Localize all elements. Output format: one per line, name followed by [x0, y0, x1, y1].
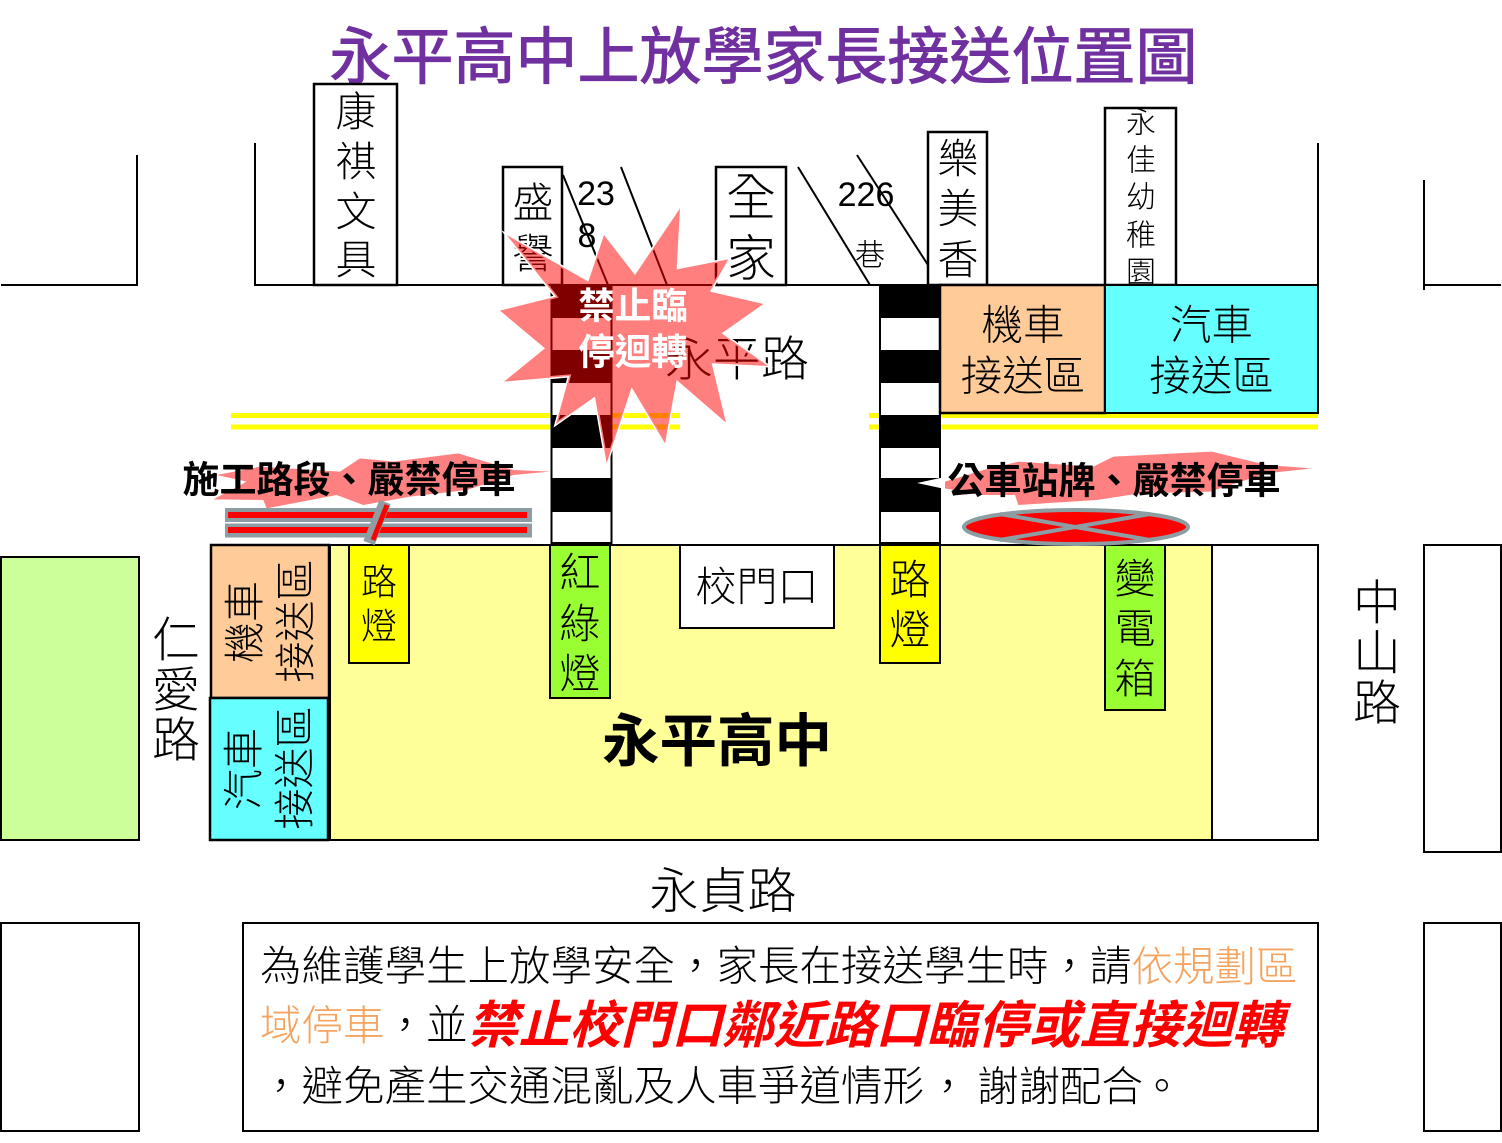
- school gate: [680, 545, 834, 628]
- motorcycle pickup zone left: [211, 545, 329, 698]
- motorcycle pickup zone top: 接送區: [961, 352, 1085, 400]
- alley number 238: [577, 175, 615, 255]
- road name: 永平路: 永平路: [665, 334, 809, 386]
- bottom left block: [1, 923, 139, 1131]
- warning burst: no stopping or U-turn: [500, 208, 768, 463]
- street light right: [880, 545, 940, 663]
- shop: 康祺文具: 康: [336, 89, 376, 135]
- shop: 樂美香: [928, 132, 987, 285]
- road name: 永貞路: 永貞路: [649, 865, 797, 919]
- school name: 永平高中: [602, 710, 832, 774]
- street light right: 路: [890, 557, 930, 603]
- warning: construction section: [182, 453, 550, 508]
- car pickup zone top: 汽車: [1170, 302, 1253, 348]
- shop: 永佳幼稚園: 永: [1126, 106, 1156, 140]
- no-parking road marking: [225, 502, 532, 543]
- warning burst: no stopping or U-turn: 禁止臨: [578, 286, 688, 326]
- traffic light: 紅: [560, 550, 600, 596]
- school grounds: [330, 545, 1212, 840]
- road name: 中山路: 中: [1353, 578, 1401, 630]
- road name: 仁愛路: 路: [152, 714, 200, 768]
- alley number 226: 226: [838, 176, 894, 214]
- road name: 仁愛路: [152, 614, 200, 768]
- shop: 康祺文具: 具: [336, 237, 376, 283]
- shop: 全家: 全: [726, 170, 776, 226]
- shop: 樂美香: 樂: [938, 136, 978, 182]
- motorcycle pickup zone left: 接送區: [273, 560, 319, 682]
- shop: 盛譽: 譽: [512, 231, 554, 277]
- transformer box: 電: [1114, 606, 1156, 652]
- notice line 3: 。: [1141, 1062, 1183, 1110]
- notice line 3: 謝謝配合: [977, 1062, 1143, 1110]
- notice panel: [243, 923, 1318, 1131]
- double yellow lines: [231, 416, 1318, 427]
- no-parking ellipse at bus stop: [964, 510, 1188, 544]
- motorcycle pickup zone top: [940, 285, 1105, 413]
- shop: 永佳幼稚園: 稚: [1126, 220, 1156, 252]
- right block: [1424, 545, 1501, 852]
- alley number 226: 巷: [855, 240, 885, 272]
- bottom right block: [1424, 923, 1501, 1131]
- shop: 盛譽: 盛: [512, 180, 554, 226]
- shop: 永佳幼稚園: [1105, 106, 1176, 290]
- traffic light: 燈: [560, 651, 600, 697]
- school gate: 校門口: [696, 564, 818, 610]
- traffic light: 綠: [560, 601, 600, 647]
- shop: 樂美香: 香: [938, 237, 978, 283]
- notice line 1: 為維護學生上放學安全，家長在接送學生時，請依規劃區: [260, 942, 1298, 990]
- transformer box: 變: [1114, 556, 1156, 602]
- motorcycle pickup zone top: 機車: [981, 302, 1065, 348]
- warning: construction section: 施工路段、嚴禁停車: [182, 460, 516, 500]
- car pickup zone left: 汽車: [221, 728, 267, 810]
- road name: 中山路: 路: [1353, 678, 1401, 730]
- motorcycle pickup zone left: 機車: [222, 581, 268, 663]
- street light left: 燈: [361, 606, 397, 646]
- notice line 2: 域停車，並禁止校門口鄰近路口臨停或直接迴轉: [260, 996, 1292, 1054]
- white block right of school: [1212, 545, 1318, 840]
- street light left: [349, 545, 409, 663]
- transformer box: 箱: [1114, 656, 1156, 702]
- street light left: 路: [361, 562, 397, 602]
- car pickup zone left: [210, 698, 328, 840]
- alley number 238: 8: [578, 217, 596, 255]
- road name: 中山路: [1353, 578, 1401, 730]
- notice line 3: ，避免產生交通混亂及人車爭道情形: [260, 1062, 924, 1110]
- notice line 3: ，: [927, 1062, 969, 1110]
- title: 永平高中上放學家長接送位置圖: [329, 24, 1198, 92]
- street light right: 燈: [890, 607, 930, 653]
- shop: 盛譽: [503, 167, 562, 285]
- road name: 仁愛路: 愛: [152, 664, 200, 718]
- car pickup zone top: 接送區: [1149, 352, 1274, 400]
- left block green: [1, 557, 139, 840]
- shop: 全家: 家: [726, 231, 776, 287]
- crosswalk left: [551, 285, 612, 543]
- shop: 全家: [716, 167, 786, 287]
- road name: 仁愛路: 仁: [152, 614, 200, 668]
- warning burst: no stopping or U-turn: 停迴轉: [578, 332, 688, 372]
- shop: 永佳幼稚園: 園: [1126, 256, 1156, 290]
- car pickup zone left: 接送區: [272, 706, 318, 830]
- car pickup zone top: [1105, 285, 1318, 413]
- shop: 永佳幼稚園: 幼: [1126, 182, 1156, 214]
- road name: 中山路: 山: [1353, 628, 1401, 680]
- warning: bus stop: 公車站牌、嚴禁停車: [948, 460, 1280, 502]
- crosswalk right: [880, 285, 940, 543]
- shop: 康祺文具: 祺: [336, 139, 376, 185]
- warning: bus stop: [917, 452, 1312, 505]
- shop: 樂美香: 美: [938, 186, 978, 232]
- transformer box: [1105, 545, 1165, 710]
- traffic light: [550, 545, 610, 698]
- alley number 238: 23: [577, 175, 615, 213]
- shop: 永佳幼稚園: 佳: [1126, 144, 1156, 178]
- shop: 康祺文具: [314, 84, 397, 285]
- road outlines: [1, 143, 1501, 290]
- alley number 226: [838, 176, 894, 272]
- shop: 康祺文具: 文: [336, 189, 376, 235]
